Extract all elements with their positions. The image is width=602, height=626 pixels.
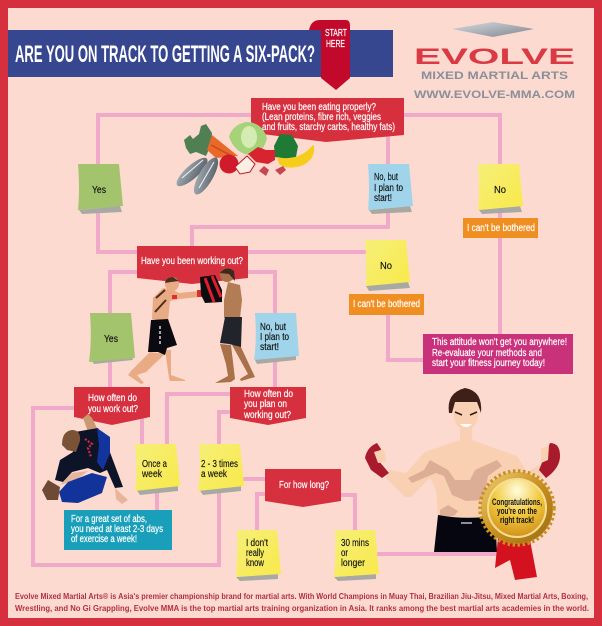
footer description	[15, 592, 589, 613]
note: yes (working out): Yes	[104, 334, 118, 345]
note: no but plan to start (working out)	[254, 313, 299, 364]
Evolve logo: MIXED MARTIAL ARTS	[421, 70, 568, 82]
title banner	[8, 30, 393, 77]
note: once a week: Once a	[142, 459, 167, 470]
carrots	[207, 135, 238, 158]
Evolve logo: WWW.EVOLVE-MMA.COM	[414, 89, 575, 101]
start here ribbon	[309, 20, 350, 90]
note: yes (eating)	[78, 164, 123, 214]
note: 2-3 times a week	[198, 444, 244, 495]
note: once a week: week	[141, 469, 163, 480]
advice box: abs	[64, 510, 172, 550]
note: I don't really know: know	[246, 558, 265, 569]
warning box: attitude	[423, 334, 573, 374]
note: I don't really know: really	[246, 548, 264, 559]
note: no (working out)	[365, 240, 410, 291]
note: no but plan to start (eating): I plan to	[374, 183, 403, 194]
body	[386, 425, 546, 518]
herbs	[184, 124, 212, 156]
note: no but plan to start (eating)	[368, 164, 413, 214]
start here ribbon: START	[325, 28, 347, 39]
label: I can't be bothered (lower): I can't be bothered	[353, 299, 420, 310]
congratulations medal: Congratulations,	[492, 497, 542, 507]
question: eating properly: Have you been eating properly?	[262, 102, 376, 113]
question: eating properly: and fruits, starchy carbs, healthy fats)	[262, 122, 395, 133]
Evolve logo: EVOLVE	[414, 44, 575, 69]
broccoli	[274, 134, 298, 159]
note: 30 mins or longer: longer	[341, 558, 366, 569]
title banner: ARE YOU ON TRACK TO GETTING A SIX-PACK?	[15, 41, 315, 68]
footer description: Wrestling, and No Gi Grappling, Evolve MMA is the top martial arts training organization in Asia. It ranks among the best martial arts academies in the world.	[15, 604, 589, 613]
right boxer	[200, 268, 255, 383]
note: 30 mins or longer	[334, 530, 379, 581]
Evolve logo	[414, 22, 575, 101]
label: I can't be bothered (top): I can't be bothered	[467, 223, 535, 234]
question: how often do you work out: How often do	[88, 393, 137, 404]
note: 2-3 times a week: 2 - 3 times	[201, 459, 238, 470]
question: for how long: For how long?	[279, 480, 329, 491]
lettuce	[229, 122, 267, 155]
advice box: abs: For a great set of abs,	[71, 514, 147, 525]
label: I can't be bothered (lower)	[349, 294, 424, 315]
note: no (eating): No	[494, 185, 506, 196]
label: I can't be bothered (top)	[463, 218, 538, 238]
warning box: attitude: Re-evaluate your methods and	[432, 348, 542, 359]
question: for how long	[265, 469, 341, 507]
muscular fighter illustration	[365, 388, 560, 552]
grappling illustration	[42, 414, 128, 504]
note: no but plan to start (eating): No, but	[374, 172, 398, 183]
left boxer	[128, 277, 202, 384]
boxers illustration	[128, 268, 255, 384]
congratulations medal: right track!	[500, 515, 534, 525]
note: yes (eating): Yes	[92, 185, 106, 196]
note: 30 mins or longer: 30 mins	[341, 538, 369, 549]
question: working out	[137, 246, 248, 284]
note: 30 mins or longer: or	[341, 548, 349, 559]
note: no (eating)	[478, 164, 523, 214]
abdominal shading	[408, 460, 502, 501]
question: how often do you plan: working out?	[243, 410, 291, 421]
note: no (working out): No	[380, 261, 392, 272]
congratulations medal: you're on the	[497, 506, 537, 516]
fish	[173, 154, 211, 190]
note: 2-3 times a week: a week	[201, 469, 228, 480]
advice box: abs: you need at least 2-3 days	[71, 524, 163, 535]
apple	[220, 154, 238, 174]
note: once a week	[135, 444, 180, 495]
advice box: abs: of exercise a week!	[71, 534, 137, 545]
start here ribbon: HERE	[326, 39, 345, 50]
note: I don't really know	[236, 530, 281, 581]
question: how often do you plan	[230, 387, 306, 425]
question: eating properly: (Lean proteins, fibre rich, veggies	[262, 112, 381, 123]
warning box: attitude: This attitude won't get you anywhere!	[432, 337, 567, 348]
shorts	[434, 515, 497, 552]
question: working out: Have you been working out?	[141, 256, 243, 267]
note: yes (working out)	[89, 313, 135, 364]
flowchart connector lines	[33, 115, 500, 565]
food illustration	[173, 122, 314, 198]
head	[453, 400, 479, 430]
note: no but plan to start (working out): start!	[260, 342, 279, 353]
note: I don't really know: I don't	[246, 538, 268, 549]
banana	[277, 145, 314, 168]
question: how often do you plan: you plan on	[244, 399, 287, 410]
question: eating properly	[251, 98, 404, 142]
strawberries	[248, 147, 275, 164]
right glove	[539, 443, 560, 478]
note: no but plan to start (working out): I plan to	[260, 332, 289, 343]
congratulations medal	[480, 471, 554, 580]
question: how often do you plan: How often do	[244, 389, 293, 400]
question: how often do you work out: you work out?	[88, 404, 138, 415]
note: no but plan to start (working out): No, but	[260, 322, 286, 333]
warning box: attitude: start your fitness journey today!	[432, 358, 545, 369]
left glove	[365, 443, 389, 478]
question: how often do you work out	[74, 387, 150, 425]
note: no but plan to start (eating): start!	[374, 193, 392, 204]
